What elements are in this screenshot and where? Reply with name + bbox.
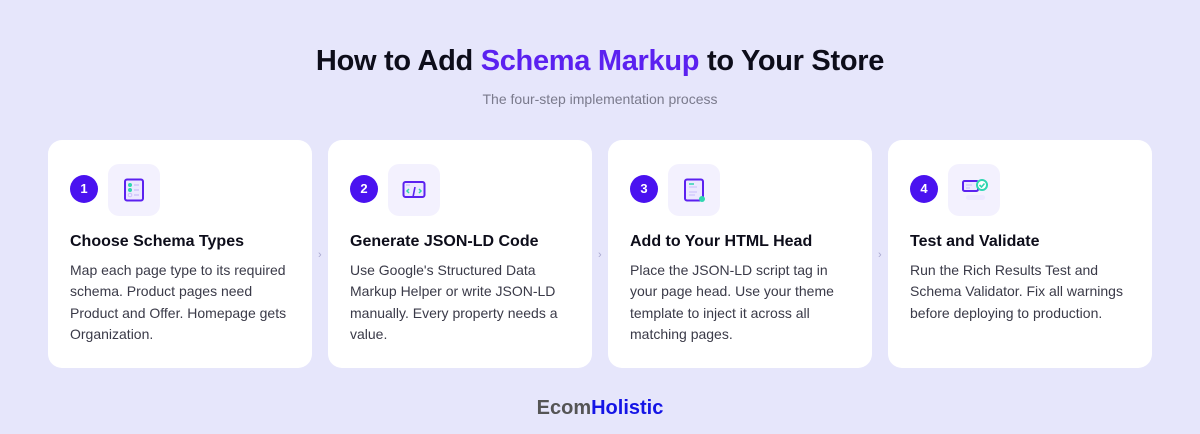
arrow: › [598, 249, 602, 261]
text: Use Google's Structured Data Markup Helper or write JSON-LD manually. Every property needs a value. [350, 262, 558, 342]
badge 1: 1 [80, 181, 88, 196]
panel: step 1 [48, 140, 312, 368]
arrow: › [878, 249, 882, 261]
icon: document [668, 164, 720, 216]
badge 3: 3 [640, 181, 648, 196]
heading: Add to Your HTML Head [630, 233, 812, 250]
icon: validate [948, 164, 1000, 216]
text: Place the JSON-LD script tag in your page head. Use your theme template to inject it across all matching pages. [630, 262, 834, 342]
heading: Generate JSON-LD Code [350, 233, 538, 250]
badge 1 [70, 175, 98, 203]
badge 3 [630, 175, 658, 203]
title: How to Add Schema Markup to Your Store [316, 45, 884, 77]
badge 4 [910, 175, 938, 203]
subtitle: The four-step implementation process [482, 91, 718, 107]
badge 4: 4 [920, 181, 928, 196]
panel: step 4 [888, 140, 1152, 368]
panel: step 2 [328, 140, 592, 368]
badge 2: 2 [360, 181, 368, 196]
text: Run the Rich Results Test and Schema Validator. Fix all warnings before deploying to production. [910, 262, 1123, 321]
panel: step 3 [608, 140, 872, 368]
text: Map each page type to its required schema. Product pages need Product and Offer. Homepage gets Organization. [70, 262, 286, 342]
badge 2 [350, 175, 378, 203]
heading: Choose Schema Types [70, 233, 244, 250]
arrow: › [318, 249, 322, 261]
footer logo: EcomHolistic [537, 397, 663, 419]
icon: code window [388, 164, 440, 216]
icon: checklist [108, 164, 160, 216]
heading: Test and Validate [910, 233, 1040, 250]
